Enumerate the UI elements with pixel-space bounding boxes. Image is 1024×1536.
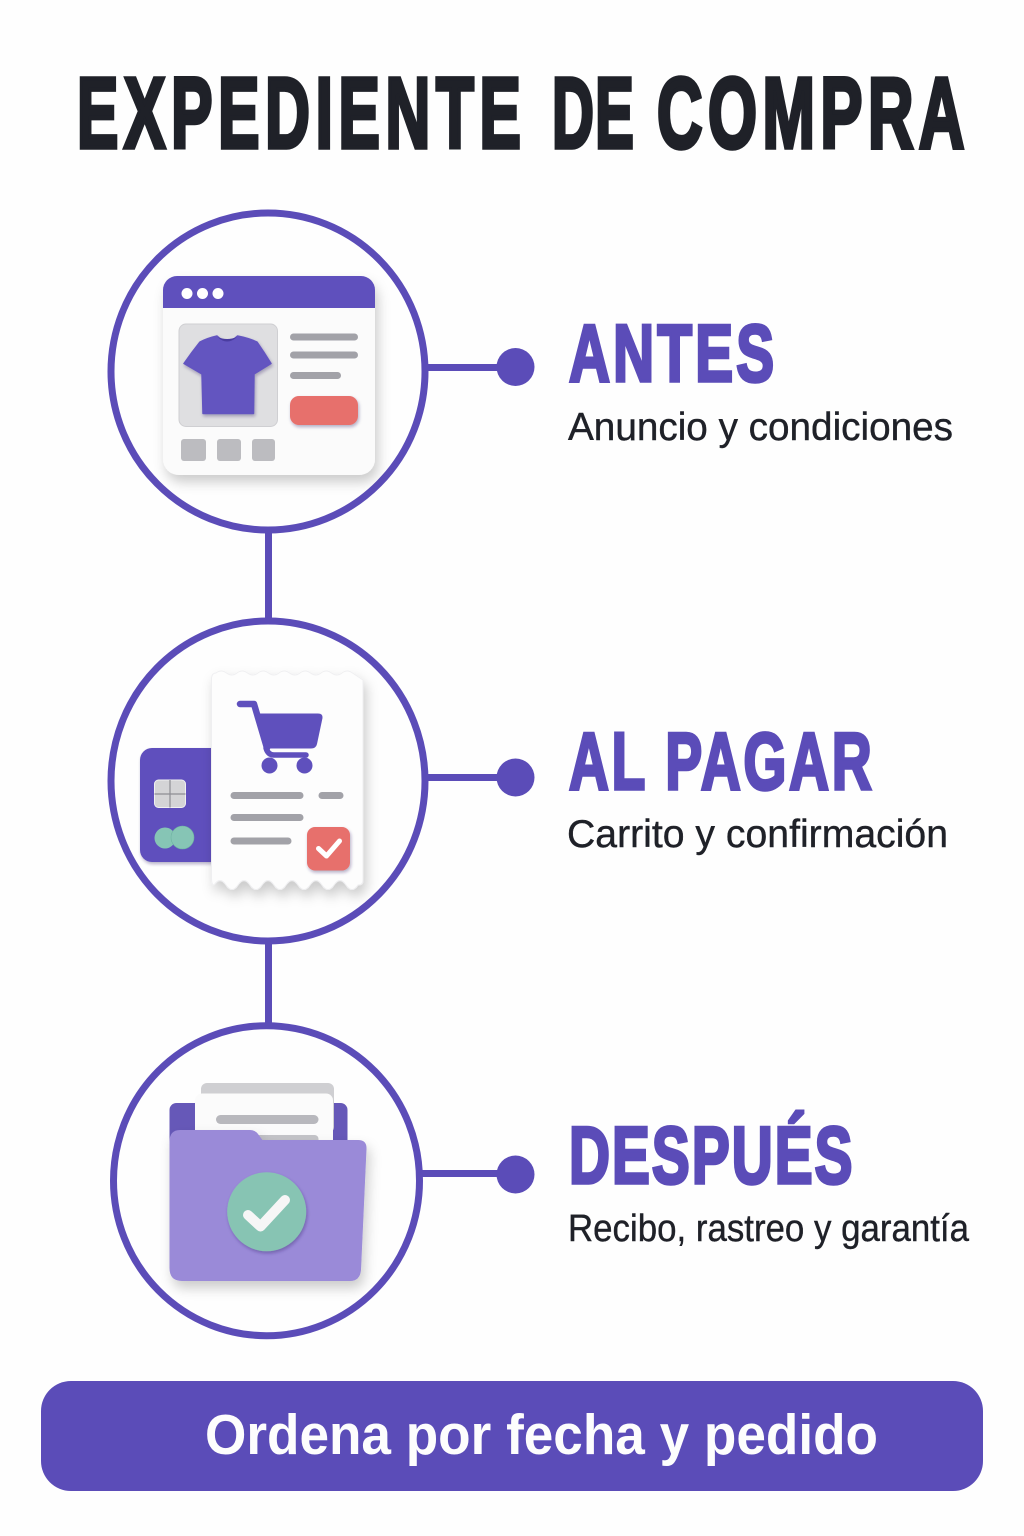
description: al pagar: Carrito y confirmación — [567, 813, 948, 856]
heading: despues: DESPUÉS — [569, 1110, 852, 1200]
step 1: antes — [111, 213, 953, 530]
connector: step 1 to step 2 — [265, 530, 272, 622]
heading: antes: ANTES — [569, 308, 774, 398]
button — [290, 396, 358, 425]
title: DE — [552, 58, 634, 170]
description: despues: Recibo, rastreo y garantía — [568, 1208, 970, 1250]
icon: shopping cart — [240, 704, 323, 774]
icon: credit card — [140, 748, 225, 862]
icon: receipt with cart — [212, 671, 363, 890]
title — [77, 57, 964, 170]
icon: product web page — [163, 276, 375, 475]
circle 2 — [111, 621, 425, 941]
connector and dot 3 — [420, 1156, 534, 1194]
icon: t-shirt — [184, 336, 271, 414]
icon: folder with documents — [170, 1083, 367, 1281]
connector: step 2 to step 3 — [265, 941, 272, 1027]
circle 3 — [114, 1026, 420, 1336]
title: COMPRA — [657, 57, 964, 169]
banner text: Ordena por fecha y pedido — [205, 1403, 878, 1467]
title: EXPEDIENTE — [77, 57, 521, 169]
icon: teal check badge — [227, 1172, 306, 1251]
footer banner — [41, 1381, 983, 1491]
connector and dot 2 — [426, 758, 534, 796]
description: antes: Anuncio y condiciones — [568, 406, 953, 449]
circle 1 — [111, 213, 425, 530]
step 2: al pagar — [111, 621, 948, 941]
connector and dot 1 — [426, 348, 534, 386]
step 3: despues — [114, 1026, 970, 1336]
heading: al pagar: AL PAGAR — [569, 715, 872, 807]
icon: red checkbox — [307, 827, 350, 870]
